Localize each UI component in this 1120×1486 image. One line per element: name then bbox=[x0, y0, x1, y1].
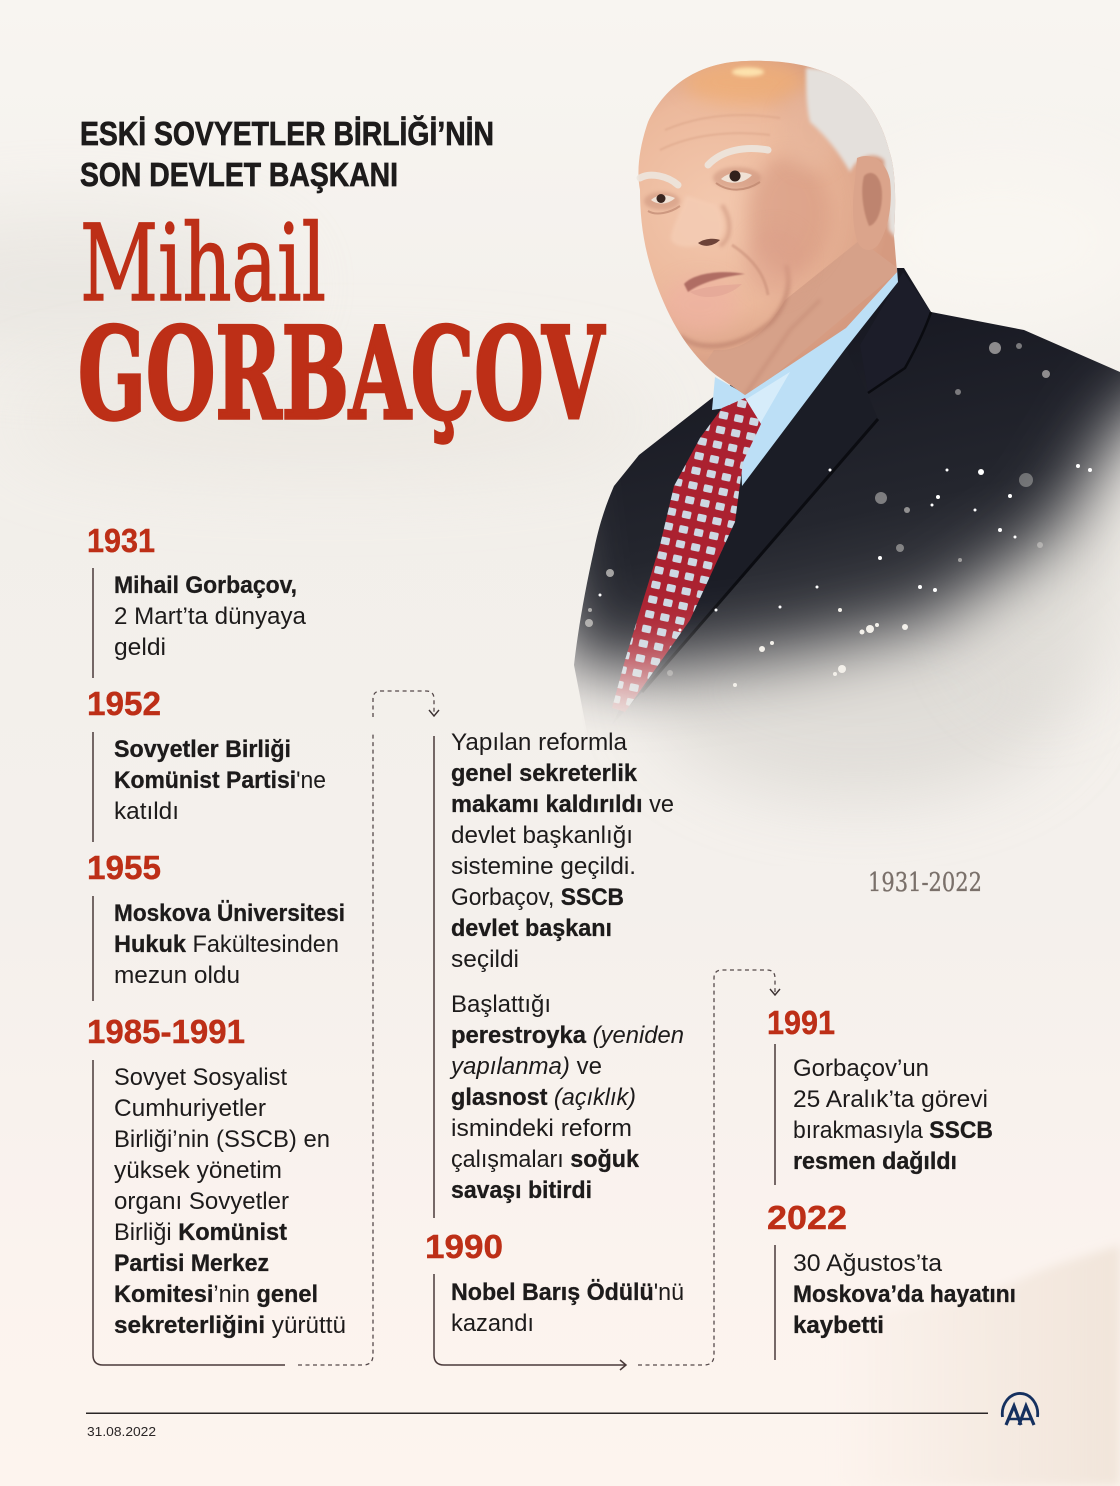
entry 1931: geldi bbox=[114, 634, 166, 661]
forehead wrinkles bbox=[660, 115, 780, 150]
reform paragraph: devlet başkanı bbox=[451, 915, 612, 942]
entry 1952: katıldı bbox=[114, 798, 179, 825]
entry 1952 bbox=[87, 685, 326, 825]
entry 1991: bırakmasıyla SSCB bbox=[793, 1117, 993, 1144]
entry 1985-1991: Partisi Merkez bbox=[114, 1250, 269, 1277]
eye sockets bbox=[644, 167, 761, 210]
entry 2022: Moskova’da hayatını bbox=[793, 1281, 1016, 1308]
entry 1952: Sovyetler Birliği bbox=[114, 736, 291, 763]
entry 1985-1991: 1985-1991 bbox=[87, 1013, 245, 1050]
reform paragraph: makamı kaldırıldı ve bbox=[451, 791, 674, 818]
entry 1990: kazandı bbox=[451, 1310, 534, 1337]
entry 1955: mezun oldu bbox=[114, 962, 240, 989]
entry 1985-1991: Komitesi’nin genel bbox=[114, 1281, 318, 1308]
entry 1985-1991 bbox=[87, 1013, 346, 1339]
reform paragraph: Gorbaçov, SSCB bbox=[451, 884, 624, 911]
perestroika paragraph: ismindeki reform bbox=[451, 1115, 632, 1142]
entry 1985-1991: organı Sovyetler bbox=[114, 1188, 289, 1215]
entry 1985-1991: Cumhuriyetler bbox=[114, 1095, 266, 1122]
reform paragraph: seçildi bbox=[451, 946, 519, 973]
entry 1991: 25 Aralık’ta görevi bbox=[793, 1086, 988, 1113]
forehead highlight bbox=[683, 60, 807, 104]
necktie bbox=[612, 398, 761, 712]
entry 1931: 2 Mart’ta dünyaya bbox=[114, 603, 307, 630]
perestroika paragraph: yapılanma) ve bbox=[449, 1053, 602, 1080]
timeline connector lines bbox=[93, 568, 780, 1370]
misty wash under the suit bbox=[650, 420, 1120, 800]
entry 1985-1991: Sovyet Sosyalist bbox=[114, 1064, 287, 1091]
entry 1985-1991: Birliği Komünist bbox=[114, 1219, 287, 1246]
timeline column 2 bbox=[425, 729, 684, 1337]
entry 1990: 1990 bbox=[425, 1228, 503, 1265]
title: Mihail: Mihail bbox=[80, 202, 326, 325]
entry 2022: 30 Ağustos’ta bbox=[793, 1250, 943, 1277]
timeline column 1 bbox=[87, 522, 346, 1339]
neck shading bbox=[700, 240, 900, 400]
entry 1952: 1952 bbox=[87, 685, 161, 722]
portrait: Gorbachev illustration bbox=[574, 55, 1120, 800]
entry 1985-1991: Birliği’nin (SSCB) en bbox=[114, 1126, 330, 1153]
perestroika paragraph: savaşı bitirdi bbox=[451, 1177, 592, 1204]
suit jacket bbox=[574, 268, 1120, 726]
entry 1955 bbox=[87, 849, 345, 989]
entry 1990 bbox=[425, 1228, 684, 1337]
entry 1985-1991: yüksek yönetim bbox=[114, 1157, 282, 1184]
eyebrows bbox=[640, 149, 768, 185]
entry 1955: Hukuk Fakültesinden bbox=[114, 931, 339, 958]
entry 1931: Mihail Gorbaçov, bbox=[114, 572, 297, 599]
entry 2022: 2022 bbox=[767, 1199, 847, 1236]
title: subtitle heading: SON DEVLET BAŞKANI bbox=[80, 156, 398, 193]
entry 2022 bbox=[767, 1199, 1016, 1339]
entry 1955: 1955 bbox=[87, 849, 161, 886]
perestroika paragraph: Başlattığı bbox=[451, 991, 551, 1018]
entry 1991: resmen dağıldı bbox=[793, 1148, 957, 1175]
title: subtitle heading bbox=[80, 115, 494, 193]
footer rule bbox=[86, 1412, 988, 1414]
entry 1985-1991: sekreterliğini yürüttü bbox=[114, 1312, 346, 1339]
eyes bbox=[648, 170, 760, 213]
perestroika paragraph: perestroyka (yeniden bbox=[451, 1022, 684, 1049]
lifespan label: 1931-2022 bbox=[868, 868, 982, 898]
date: 31.08.2022 bbox=[87, 1424, 156, 1439]
icon: AA logo bbox=[1002, 1393, 1038, 1425]
perestroika paragraph: glasnost (açıklık) bbox=[451, 1084, 636, 1111]
entry 1931 bbox=[87, 522, 307, 661]
mouth bbox=[684, 245, 768, 297]
entry 1991: Gorbaçov’un bbox=[793, 1055, 929, 1082]
entry 1991: 1991 bbox=[767, 1004, 835, 1041]
title: subtitle heading: ESKİ SOVYETLER BİRLİĞİ’NİN bbox=[80, 115, 494, 152]
entry 1991 bbox=[767, 1004, 993, 1175]
entry 2022: kaybetti bbox=[793, 1312, 884, 1339]
reform paragraph: devlet başkanlığı bbox=[451, 822, 633, 849]
perestroika paragraph bbox=[449, 991, 684, 1204]
entry 1955: Moskova Üniversitesi bbox=[114, 900, 345, 927]
white hair bbox=[806, 68, 902, 245]
head bbox=[630, 55, 905, 400]
entry 1931: 1931 bbox=[87, 522, 155, 559]
perestroika paragraph: çalışmaları soğuk bbox=[451, 1146, 640, 1173]
ear bbox=[853, 156, 891, 250]
shirt collar bbox=[712, 268, 898, 486]
entry 1990: Nobel Barış Ödülü'nü bbox=[451, 1279, 684, 1306]
nose bbox=[671, 195, 729, 247]
timeline column 3 bbox=[767, 1004, 1016, 1339]
title: GORBAÇOV: GORBAÇOV bbox=[78, 300, 605, 448]
reform paragraph: genel sekreterlik bbox=[451, 760, 638, 787]
dust speckles bbox=[585, 342, 1092, 687]
reform paragraph: Yapılan reformla bbox=[451, 729, 628, 756]
reform paragraph: sistemine geçildi. bbox=[451, 853, 636, 880]
reform paragraph bbox=[451, 729, 674, 973]
entry 1952: Komünist Partisi'ne bbox=[114, 767, 326, 794]
